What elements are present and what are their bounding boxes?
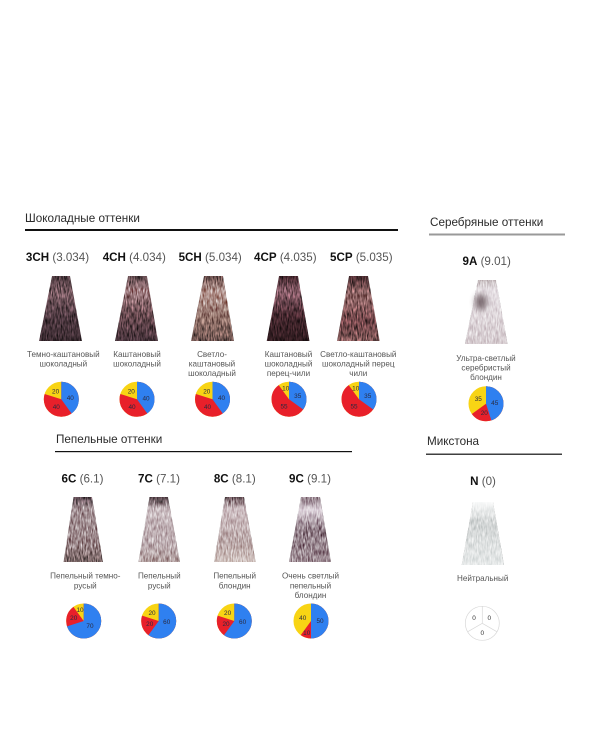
- pie chart: 20: [224, 610, 232, 617]
- shade: 6C: [50, 472, 121, 630]
- hair swatch: [64, 497, 103, 562]
- shade: 5CP: [320, 251, 396, 410]
- shade: 8C: [213, 472, 256, 630]
- pie chart: 0: [481, 630, 485, 637]
- hair swatch: [138, 497, 180, 562]
- caption: Ультра-светлый: [456, 354, 516, 363]
- caption: пепельный: [290, 582, 331, 590]
- code: 8C (8.1): [214, 472, 256, 486]
- caption: Темно-каштановый: [27, 350, 100, 359]
- pie chart: [70, 607, 94, 630]
- pie chart: [52, 388, 74, 411]
- pie chart: 10: [76, 607, 84, 614]
- hair swatch: [462, 502, 504, 565]
- hair swatch: [289, 497, 331, 562]
- code: N (0): [470, 475, 496, 488]
- caption: перец-чили: [267, 369, 310, 378]
- code: 3CH (3.034): [26, 251, 89, 264]
- shade: 5CH: [179, 251, 242, 411]
- pie chart: [475, 395, 499, 417]
- caption: серебристый: [461, 364, 511, 372]
- heading: chocolate shades: Шоколадные оттенки: [25, 212, 140, 225]
- pie chart: [222, 610, 247, 630]
- caption: каштановый: [189, 360, 235, 368]
- pie chart: 10: [303, 630, 311, 637]
- caption: блондин: [219, 582, 251, 590]
- pie chart: 20: [128, 388, 135, 395]
- pie chart: 35: [475, 396, 482, 403]
- heading rule: [25, 229, 398, 231]
- pie chart: 55: [350, 403, 358, 410]
- pie chart: 70: [86, 623, 94, 630]
- pie chart: 45: [491, 400, 499, 407]
- caption: Пепельный темно-: [50, 572, 121, 580]
- caption: шоколадный перец: [322, 360, 395, 368]
- caption: Пепельный: [213, 572, 256, 580]
- caption: Очень светлый: [282, 572, 339, 580]
- code: 4CH (4.034): [103, 251, 166, 264]
- caption: шоколадный: [39, 360, 87, 368]
- shade: 4CP: [254, 251, 317, 410]
- pie chart: 35: [364, 393, 372, 400]
- caption: чили: [349, 369, 367, 378]
- pie chart: 20: [146, 621, 154, 628]
- pie chart: 40: [142, 395, 150, 402]
- heading: silver shades: Серебряные оттенки: [430, 216, 543, 229]
- caption: Светло-: [197, 350, 227, 359]
- heading rule: [429, 234, 565, 236]
- pie chart: 20: [70, 615, 78, 622]
- code: 9A (9.01): [463, 255, 511, 268]
- pie chart: 40: [128, 404, 136, 411]
- pie chart: [299, 612, 324, 637]
- shade: 3CH: [26, 251, 100, 411]
- pie chart: 20: [222, 621, 230, 628]
- code: 9C (9.1): [289, 472, 331, 486]
- hair swatch: [337, 276, 380, 341]
- shade: 7C: [138, 472, 181, 630]
- pie chart: 40: [299, 615, 307, 622]
- caption: Каштановый: [265, 350, 312, 359]
- pie chart: 0: [488, 615, 492, 622]
- pie chart: 40: [67, 395, 74, 402]
- hair swatch: [115, 276, 158, 341]
- pie chart: [465, 606, 499, 640]
- pie chart: 50: [316, 618, 324, 625]
- pie chart: [280, 386, 302, 410]
- code: 7C (7.1): [138, 472, 180, 486]
- caption: шоколадный: [265, 360, 312, 368]
- heading rule: [426, 454, 562, 455]
- heading rule: [55, 451, 352, 452]
- panel: chocolate shades: [25, 212, 398, 411]
- hair swatch: [465, 280, 508, 344]
- pie chart: [203, 388, 225, 411]
- pie chart: 20: [148, 610, 156, 617]
- pie chart: 60: [239, 619, 247, 626]
- code: 6C (6.1): [62, 472, 104, 486]
- pie chart: [128, 388, 150, 411]
- caption: шоколадный: [113, 360, 161, 368]
- pie chart: 10: [352, 385, 360, 392]
- pie chart: 40: [204, 404, 211, 411]
- caption: Светло-каштановый: [320, 350, 396, 359]
- hair swatch: [267, 276, 310, 341]
- code: 5CH (5.034): [179, 251, 242, 264]
- caption: Пепельный: [138, 572, 181, 580]
- caption: блондин: [295, 591, 326, 600]
- caption: русый: [148, 582, 171, 590]
- pie chart: 35: [294, 393, 302, 400]
- pie chart: [350, 386, 372, 410]
- caption: Каштановый: [113, 350, 161, 359]
- hair swatch: [39, 276, 82, 341]
- pie chart: 20: [481, 410, 488, 417]
- pie chart: 60: [163, 619, 171, 626]
- caption: блондин: [470, 373, 502, 382]
- hair swatch: [191, 276, 234, 341]
- panel: ash shades: [50, 433, 352, 637]
- heading: mixtone: Микстона: [427, 435, 480, 448]
- pie chart: 10: [282, 385, 290, 392]
- pie chart: 20: [203, 388, 211, 395]
- pie chart: 20: [52, 388, 60, 395]
- pie chart: 0: [472, 615, 476, 622]
- caption: Нейтральный: [457, 574, 508, 583]
- panel: silver shades: [429, 216, 565, 417]
- pie chart: 40: [53, 404, 60, 411]
- panel: mixtone: [426, 435, 562, 640]
- shade: 4CH: [103, 251, 166, 411]
- pie chart: 40: [218, 395, 225, 402]
- caption: шоколадный: [188, 369, 236, 378]
- heading: ash shades: Пепельные оттенки: [56, 433, 162, 446]
- pie chart: 55: [280, 403, 288, 410]
- code: 5CP (5.035): [330, 251, 393, 264]
- hair swatch: [214, 497, 256, 562]
- code: 4CP (4.035): [254, 251, 317, 264]
- pie chart: [146, 610, 171, 630]
- caption: русый: [74, 582, 97, 590]
- shade: 9C: [282, 472, 339, 637]
